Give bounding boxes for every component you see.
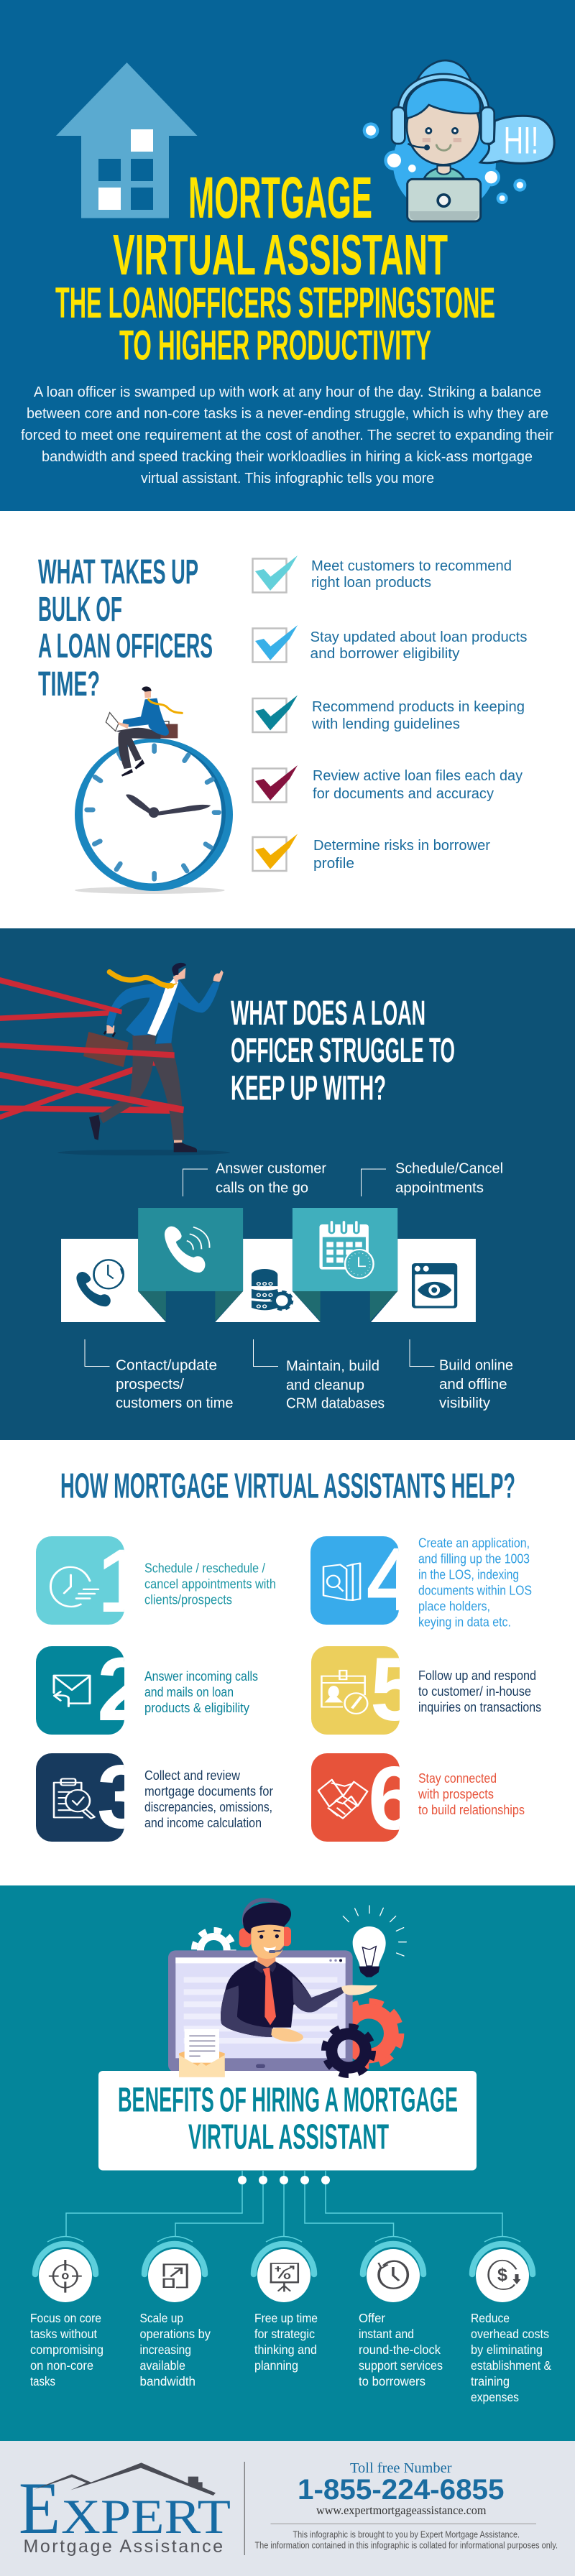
callout: online and offline visibility: and offline	[439, 1376, 507, 1393]
tile 4: create application: and filling up the 1003	[418, 1552, 530, 1566]
heading: benefits: VIRTUAL ASSISTANT	[188, 2118, 389, 2157]
check item 1: Meet customers to recommend	[311, 558, 512, 574]
callout: schedule or cancel appointments: Schedule/Cancel	[395, 1160, 503, 1177]
tile 1: schedule: 1	[98, 1531, 148, 1631]
panel: benefits section background	[0, 1885, 575, 2441]
tile 2: calls and mails	[36, 1646, 257, 1735]
disclaimer text: This infographic is brought to you by Expert Mortgage Assistance.	[293, 2529, 520, 2539]
check item 5	[253, 834, 490, 872]
benefit 1: focus on core tasks: tasks without	[30, 2327, 97, 2341]
benefit 1: focus on core tasks: Focus on core	[30, 2311, 101, 2325]
tile 6: stay connected	[311, 1753, 525, 1842]
icon: ringing phone	[165, 1227, 209, 1273]
panel: header background	[0, 0, 575, 511]
icon: clock with arrow	[379, 2261, 408, 2289]
check item 2: and borrower eligibility	[310, 646, 460, 662]
tile 1: schedule	[36, 1536, 275, 1625]
tile 1: schedule: cancel appointments with	[144, 1576, 276, 1591]
callout: contact and update prospects	[85, 1339, 233, 1411]
icon: handshake	[318, 1780, 367, 1819]
heading: what takes up time	[38, 553, 213, 703]
benefit 1: focus on core tasks: compromising	[30, 2342, 104, 2357]
check item 3	[253, 696, 525, 732]
tile 4: create application: place holders,	[418, 1599, 490, 1614]
panel: benefits title box	[98, 2071, 477, 2170]
icon: clipboard with magnifier	[54, 1779, 95, 1819]
tile 4: create application: in the LOS, indexing	[418, 1568, 519, 1582]
icon: dollar with down arrow	[489, 2261, 520, 2289]
icon: CRM database with gear	[252, 1269, 292, 1310]
icon: assistant avatar with headset and laptop	[363, 60, 554, 221]
callout: contact and update prospects: prospects/	[116, 1376, 184, 1393]
panel: how assistants help background	[0, 1440, 575, 1885]
callout: maintain CRM databases: and cleanup	[286, 1377, 364, 1393]
tile 2: calls and mails: 2	[97, 1640, 147, 1740]
text block: introduction: virtual assistant. This infographic tells you more	[141, 470, 434, 486]
icon: documents with magnifier	[323, 1564, 360, 1600]
icon: browser window with eye	[412, 1263, 457, 1308]
benefit 5: reduce overhead costs: Reduce	[471, 2311, 510, 2325]
check item 5: Determine risks in borrower	[313, 838, 490, 854]
callout: contact and update prospects: customers on time	[116, 1395, 233, 1411]
check item 2: Stay updated about loan products	[310, 629, 528, 645]
tile 5: follow up: Follow up and respond	[418, 1668, 536, 1683]
icon: light bulb	[343, 1906, 406, 1977]
check item 1	[253, 555, 512, 592]
benefit 2: scale up operations: Scale up	[139, 2311, 183, 2325]
tile 3: review documents	[36, 1753, 273, 1842]
callout: contact and update prospects: Contact/update	[116, 1357, 217, 1374]
benefit 3: free up time	[254, 2236, 318, 2373]
tile 1: schedule: clients/prospects	[144, 1592, 232, 1607]
text block: introduction: between core and non-core tasks is a never-ending struggle, which is why they are	[27, 405, 548, 422]
tile 5: follow up	[311, 1646, 540, 1735]
heading: what takes up time: TIME?	[38, 665, 100, 703]
heading: what takes up time: A LOAN OFFICERS	[38, 627, 213, 665]
logo: Expert Mortgage Assistance: E	[19, 2467, 60, 2549]
tile 4: create application: 4	[367, 1530, 417, 1630]
connector tree: lines and dots from title to benefits	[66, 2171, 502, 2237]
icon: envelope with reply arrow	[54, 1676, 90, 1707]
icon: calendar with clock	[319, 1222, 374, 1278]
tile 6: stay connected: to build relationships	[418, 1803, 525, 1817]
benefit 5: reduce overhead costs	[471, 2236, 551, 2404]
callout: maintain CRM databases: CRM databases	[286, 1395, 385, 1411]
text block: introduction: bandwidth and speed tracking their workloadlies in hiring a kick-ass mortgage	[42, 448, 533, 465]
benefit 1: focus on core tasks: tasks	[30, 2374, 55, 2388]
tile 3: review documents: and income calculation	[144, 1816, 262, 1830]
benefit 4: round the clock support: to borrowers	[359, 2374, 426, 2388]
divider: footer vertical rule	[244, 2462, 245, 2555]
disclaimer text	[254, 2529, 558, 2551]
check item 2	[253, 625, 528, 663]
heading: what takes up time: BULK OF	[38, 591, 122, 629]
benefit 5: reduce overhead costs: establishment &	[471, 2358, 551, 2373]
icon: phone with clock	[76, 1260, 124, 1306]
tile 2: calls and mails: Answer incoming calls	[144, 1669, 258, 1684]
check item 5: profile	[313, 856, 354, 872]
icon: strategy board	[270, 2263, 299, 2291]
benefit 5: reduce overhead costs: by eliminating	[471, 2342, 543, 2357]
icon: dollar with down arrow: $	[497, 2265, 507, 2285]
callout: online and offline visibility: visibility	[439, 1395, 491, 1411]
tile 4: create application: documents within LOS	[418, 1584, 532, 1598]
tile 3: review documents: Collect and review	[144, 1768, 241, 1783]
tile 5: follow up: 5	[370, 1640, 420, 1740]
logo: Expert Mortgage Assistance: XPERT	[61, 2489, 231, 2544]
contact block: toll free number: 1-855-224-6855	[298, 2474, 505, 2506]
benefit 3: free up time: Free up time	[254, 2311, 318, 2325]
benefit 3: free up time: for strategic	[254, 2327, 315, 2341]
text block: introduction: A loan officer is swamped up with work at any hour of the day. Striking a balance	[34, 384, 541, 400]
benefit 2: scale up operations: bandwidth	[139, 2374, 196, 2388]
illustration: envelope and dark gear overlapping the title box	[179, 2026, 373, 2077]
benefit 4: round the clock support: instant and	[359, 2327, 414, 2341]
benefit 4: round the clock support: support services	[359, 2358, 443, 2373]
contact block: toll free number: Toll free Number	[350, 2460, 452, 2476]
icon: assistant avatar with headset and laptop: HI!	[504, 119, 538, 162]
contact block: toll free number: www.expertmortgageassistance.com	[316, 2503, 486, 2517]
icon: ID badge with pencil	[321, 1671, 367, 1714]
illustration: virtual assistant in tablet with bulb and gears	[168, 1900, 406, 2072]
tile 4: create application: keying in data etc.	[418, 1615, 511, 1630]
tile 6: stay connected: with prospects	[418, 1787, 494, 1801]
icon strip: five task tiles	[61, 1208, 476, 1322]
tile 4: create application: Create an application,	[418, 1536, 530, 1551]
tile 1: schedule: Schedule / reschedule /	[144, 1561, 265, 1575]
check item 1: right loan products	[311, 575, 431, 591]
checklist: loan officer tasks	[253, 555, 528, 872]
heading: what takes up time: WHAT TAKES UP	[38, 553, 198, 591]
tile 3: review documents: 3	[97, 1748, 147, 1847]
benefit 3: free up time: planning	[254, 2358, 298, 2373]
tile 5: follow up: to customer/ in-house	[418, 1684, 531, 1699]
tile 3: review documents: discrepancies, omissions,	[144, 1800, 272, 1814]
benefit 5: reduce overhead costs: training	[471, 2374, 510, 2388]
callout: schedule or cancel appointments: appointments	[395, 1180, 484, 1196]
benefit 5: reduce overhead costs: overhead costs	[471, 2327, 549, 2341]
check item 4: Review active loan files each day	[313, 768, 523, 784]
check item 3: Recommend products in keeping	[312, 699, 525, 715]
heading: what does a loan officer struggle with: WHAT DOES A LOAN	[231, 994, 426, 1033]
benefit 1: focus on core tasks: on non-core	[30, 2358, 93, 2373]
tile 2: calls and mails: and mails on loan	[144, 1685, 234, 1699]
illustration: man with laptop sitting on clock	[75, 686, 233, 894]
icon: house	[56, 63, 197, 218]
benefit 2: scale up operations: operations by	[139, 2327, 211, 2341]
benefit 1: focus on core tasks	[30, 2236, 104, 2388]
check item 3: with lending guidelines	[311, 716, 460, 732]
title	[55, 165, 495, 369]
icon: resize arrow	[164, 2264, 187, 2287]
callout: maintain CRM databases: Maintain, build	[286, 1358, 380, 1374]
panel: time section background	[0, 511, 575, 928]
benefit 2: scale up operations: available	[139, 2358, 185, 2373]
callout: answer customer calls: calls on the go	[216, 1180, 308, 1196]
icon: target	[49, 2260, 82, 2293]
benefit 4: round the clock support: round-the-clock	[359, 2342, 441, 2357]
tile 6: stay connected: Stay connected	[418, 1771, 497, 1786]
logo: Expert Mortgage Assistance	[19, 2462, 231, 2557]
title: MORTGAGE	[188, 165, 372, 231]
tile 5: follow up: inquiries on transactions	[418, 1700, 541, 1714]
text block: introduction	[21, 384, 553, 486]
heading: benefits	[118, 2081, 458, 2157]
benefit 3: free up time: thinking and	[254, 2342, 317, 2357]
callout: online and offline visibility	[410, 1339, 513, 1411]
contact block: toll free number	[298, 2460, 505, 2517]
text block: introduction: forced to meet one requirement at the cost of another. The secret to expanding their	[21, 427, 553, 443]
benefit 4: round the clock support	[359, 2236, 443, 2388]
logo: Expert Mortgage Assistance: Mortgage Assistance	[23, 2536, 223, 2557]
tile 2: calls and mails: products & eligibility	[144, 1701, 249, 1715]
callout: maintain CRM databases	[253, 1339, 385, 1411]
panel: struggle section background	[0, 928, 575, 1440]
check item 4: for documents and accuracy	[313, 786, 494, 802]
icon: clock with lines	[50, 1567, 98, 1607]
callout: answer customer calls: Answer customer	[216, 1160, 326, 1177]
benefit 4: round the clock support: Offer	[359, 2311, 385, 2325]
tile 4: create application	[310, 1530, 532, 1630]
panel: footer background	[0, 2441, 575, 2576]
heading: what does a loan officer struggle with	[231, 994, 455, 1108]
illustration: businessman running through red tape	[0, 963, 230, 1155]
callout: schedule or cancel appointments	[361, 1160, 503, 1196]
check item 4	[253, 765, 523, 802]
benefit 5: reduce overhead costs: expenses	[471, 2390, 519, 2404]
callout: answer customer calls	[183, 1160, 326, 1196]
heading: what does a loan officer struggle with: KEEP UP WITH?	[231, 1069, 386, 1108]
benefit 2: scale up operations	[139, 2236, 211, 2388]
tile 3: review documents: mortgage documents for	[144, 1784, 273, 1799]
tile 6: stay connected: 6	[368, 1749, 418, 1849]
callout: online and offline visibility: Build online	[439, 1357, 513, 1374]
benefit 2: scale up operations: increasing	[139, 2342, 191, 2357]
